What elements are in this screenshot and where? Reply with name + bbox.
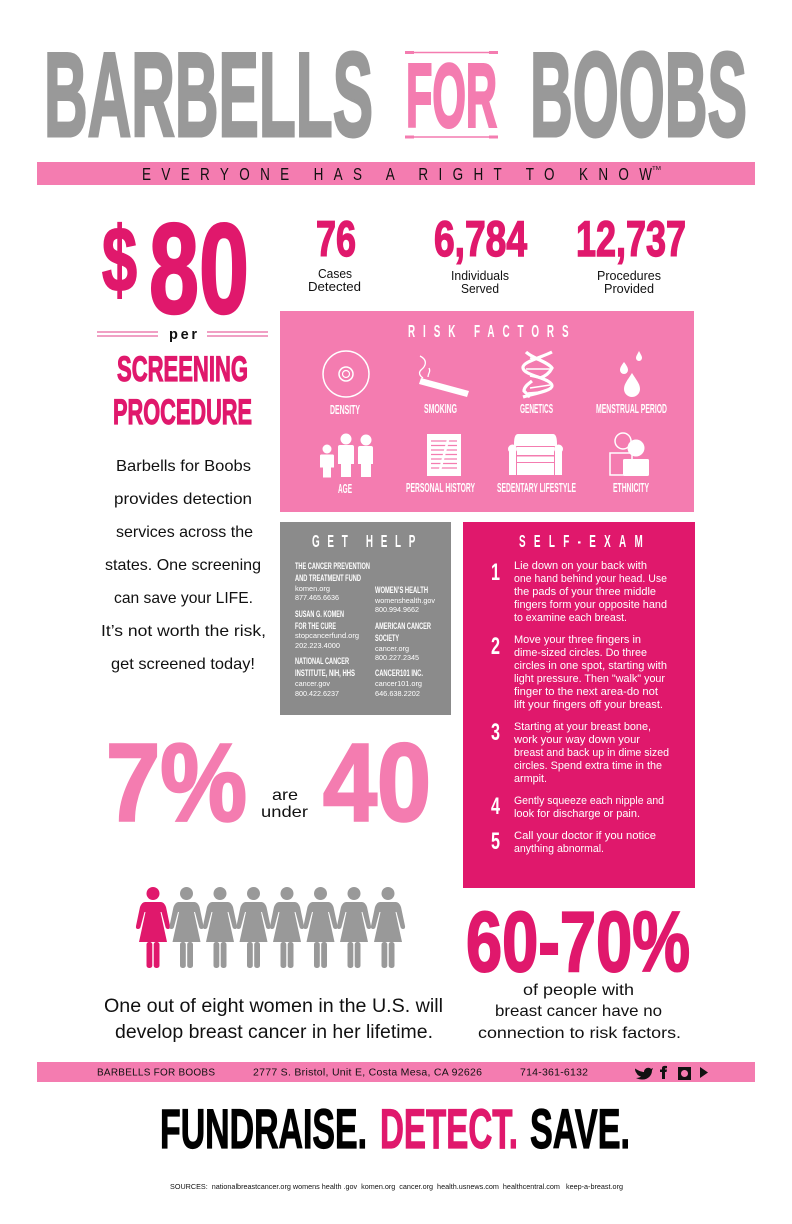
price: $80 per screening procedure: SCREENING: [117, 350, 248, 389]
icon: menstrual period: [596, 351, 667, 416]
icon: personal history: PERSONAL HISTORY: [406, 481, 475, 495]
stat: 12,737 procedures provided: Procedures: [597, 268, 661, 283]
right column resources: 800.227.2345: [375, 653, 419, 662]
step 3: 3: [491, 719, 500, 746]
stat: 76 cases detected: Detected: [308, 279, 361, 294]
step 2: lift your fingers off your breast.: [514, 699, 663, 711]
left column resources: THE CANCER PREVENTION: [295, 561, 370, 572]
left column resources: SUSAN G. KOMEN: [295, 609, 344, 620]
right column resources: SOCIETY: [375, 633, 399, 644]
slogan: fundraise detect save: SAVE.: [530, 1097, 630, 1160]
left column resources: cancer.gov: [295, 679, 330, 688]
right column resources: WOMEN’S HEALTH: [375, 585, 428, 596]
panel: self-exam: [463, 522, 695, 888]
stat: 60-70%: of people with: [523, 982, 634, 999]
stat: 12,737 procedures provided: 12,737: [576, 211, 686, 267]
intro paragraph: get screened today!: [111, 656, 255, 673]
icon: sedentary lifestyle: [497, 434, 576, 495]
intro paragraph: [101, 458, 266, 673]
left column resources: NATIONAL CANCER: [295, 656, 349, 667]
step 1: to examine each breast.: [514, 612, 627, 624]
icon: instagram: [678, 1067, 691, 1080]
panel: risk factors: [280, 311, 694, 512]
icon: menstrual period: MENSTRUAL PERIOD: [596, 402, 667, 416]
left column resources: AND TREATMENT FUND: [295, 573, 361, 584]
icon: age: AGE: [338, 482, 352, 496]
icon: smoking: [419, 356, 469, 416]
right column resources: [374, 585, 435, 698]
footer contact bar: BARBELLS FOR BOOBS: [97, 1068, 215, 1078]
stat: 7% are under 40: [106, 722, 431, 844]
left column resources: 877.465.6636: [295, 593, 339, 602]
step 1: [491, 559, 667, 624]
step 5: Call your doctor if you notice: [514, 830, 656, 842]
icon: smoking: SMOKING: [424, 402, 457, 416]
title: Barbells for Boobs: FOR: [406, 46, 497, 146]
right column resources: cancer.org: [375, 644, 409, 653]
icon: density: [323, 351, 369, 417]
footer contact bar: [37, 1062, 755, 1082]
footer contact bar: 714-361-6132: [520, 1066, 588, 1078]
icon: ethnicity: [610, 433, 649, 495]
stat: 12,737 procedures provided: [576, 211, 686, 296]
step 1: 1: [491, 559, 500, 586]
intro paragraph: Barbells for Boobs: [116, 458, 251, 475]
step 3: Starting at your breast bone,: [514, 721, 651, 733]
title: Barbells for Boobs: BARBELLS: [44, 28, 373, 162]
icon: personal history: [406, 434, 475, 495]
women in grey: [169, 887, 405, 968]
icon: facebook: [660, 1066, 667, 1079]
step 2: 2: [491, 633, 500, 660]
intro paragraph: provides detection: [114, 491, 252, 508]
step 3: circles. Spend extra time in the: [514, 760, 662, 772]
right column resources: cancer101.org: [375, 679, 422, 688]
stat: 6,784 individuals served: Served: [461, 281, 499, 296]
slogan: fundraise detect save: DETECT.: [380, 1097, 518, 1160]
price: $80 per screening procedure: $: [102, 209, 137, 311]
left column resources: INSTITUTE, NIH, HHS: [295, 668, 355, 679]
step 2: Move your three fingers in: [514, 634, 641, 646]
stat: 6,784 individuals served: [434, 211, 527, 296]
icon: sedentary lifestyle: SEDENTARY LIFESTYLE: [497, 481, 576, 495]
text: one out of eight: develop breast cancer in her lifetime.: [115, 1022, 433, 1043]
intro paragraph: It’s not worth the risk,: [101, 623, 266, 640]
step 2: finger to the next area-do not: [514, 686, 658, 698]
icon: density: DENSITY: [330, 403, 360, 417]
stat: 60-70%: connection to risk factors.: [478, 1025, 681, 1042]
pictogram: one in eight women: [136, 887, 405, 968]
tagline banner: EVERYONE HAS A RIGHT TO KNOW: [142, 165, 652, 185]
stat: 60-70%: 60-70%: [466, 895, 690, 990]
step 2: circles in one spot, starting with: [514, 660, 667, 672]
intro paragraph: states. One screening: [105, 557, 261, 574]
stat: 7% are under 40: under: [261, 804, 309, 821]
stat: 76 cases detected: [308, 211, 361, 294]
icon: genetics: GENETICS: [520, 402, 553, 416]
icon: ethnicity: ETHNICITY: [613, 481, 649, 495]
stat: 7% are under 40: are: [272, 787, 298, 804]
step 5: 5: [491, 828, 500, 855]
stat: 7% are under 40: 40: [323, 722, 431, 844]
panel: get help: [280, 522, 451, 715]
price: $80 per screening procedure: [97, 198, 268, 432]
price: $80 per screening procedure: PROCEDURE: [113, 393, 252, 432]
step 2: dime-sized circles. Do three: [514, 647, 647, 659]
step 4: look for discharge or pain.: [514, 808, 640, 820]
tagline banner: [37, 162, 755, 185]
step 2: [491, 633, 667, 711]
icon: play: [700, 1067, 708, 1078]
left column resources: komen.org: [295, 584, 330, 593]
left column resources: stopcancerfund.org: [295, 631, 359, 640]
left column resources: FOR THE CURE: [295, 621, 336, 632]
step 5: [491, 828, 656, 855]
icon: genetics: [520, 352, 553, 416]
step 4: 4: [491, 793, 500, 820]
stat: 60-70%: [466, 895, 690, 1042]
text: one out of eight: [104, 996, 443, 1043]
step 3: armpit.: [514, 773, 547, 785]
right column resources: 800.994.9662: [375, 605, 419, 614]
icon: age: [320, 434, 373, 496]
step 4: Gently squeeze each nipple and: [514, 795, 664, 807]
tagline banner: TM: [652, 166, 661, 172]
slogan: fundraise detect save: FUNDRAISE.: [160, 1097, 367, 1160]
stat: 6,784 individuals served: Individuals: [451, 268, 509, 283]
step 3: work your way down your: [513, 734, 640, 746]
step 3: [491, 719, 669, 785]
heading: self-exam: SELF-EXAM: [519, 532, 643, 552]
sources: SOURCES: nationalbreastcancer.org womens health .gov komen.org cancer.org health.usnews.com healthcentral.com keep-a-breast.org: [170, 1182, 623, 1191]
left column resources: [295, 561, 370, 698]
step 1: the pads of your three middle: [514, 586, 656, 598]
stat: 7% are under 40: 7%: [106, 722, 247, 844]
right column resources: AMERICAN CANCER: [375, 621, 431, 632]
stat: 6,784 individuals served: 6,784: [434, 211, 527, 267]
footer contact bar: 2777 S. Bristol, Unit E, Costa Mesa, CA 92626: [253, 1066, 482, 1078]
left column resources: 800.422.6237: [295, 689, 339, 698]
icon: twitter: [635, 1068, 653, 1080]
right column resources: womenshealth.gov: [374, 596, 435, 605]
stat: 60-70%: breast cancer have no: [495, 1003, 662, 1020]
intro paragraph: can save your LIFE.: [114, 590, 253, 607]
stat: 12,737 procedures provided: Provided: [604, 281, 654, 296]
step 1: Lie down on your back with: [514, 560, 647, 572]
right column resources: 646.638.2202: [375, 689, 420, 698]
step 1: one hand behind your head. Use: [514, 573, 667, 585]
step 4: [491, 793, 664, 820]
woman highlighted: [136, 887, 170, 968]
intro paragraph: services across the: [116, 524, 253, 541]
text: one out of eight: One out of eight women in the U.S. will: [104, 996, 443, 1017]
price: $80 per screening procedure: per: [169, 327, 197, 343]
right column resources: CANCER101 INC.: [375, 668, 423, 679]
stat: 76 cases detected: Cases: [318, 266, 352, 281]
heading: get help: GET HELP: [312, 532, 416, 552]
heading: risk factors: RISK FACTORS: [408, 322, 569, 342]
step 3: breast and back up in dime sized: [514, 747, 669, 759]
step 1: fingers form your opposite hand: [514, 599, 667, 611]
step 5: anything abnormal.: [514, 843, 604, 855]
step 2: light pressure. Then "walk" your: [514, 673, 665, 685]
left column resources: 202.223.4000: [295, 641, 340, 650]
price: $80 per screening procedure: 80: [149, 198, 249, 341]
stat: 76 cases detected: 76: [316, 211, 356, 267]
